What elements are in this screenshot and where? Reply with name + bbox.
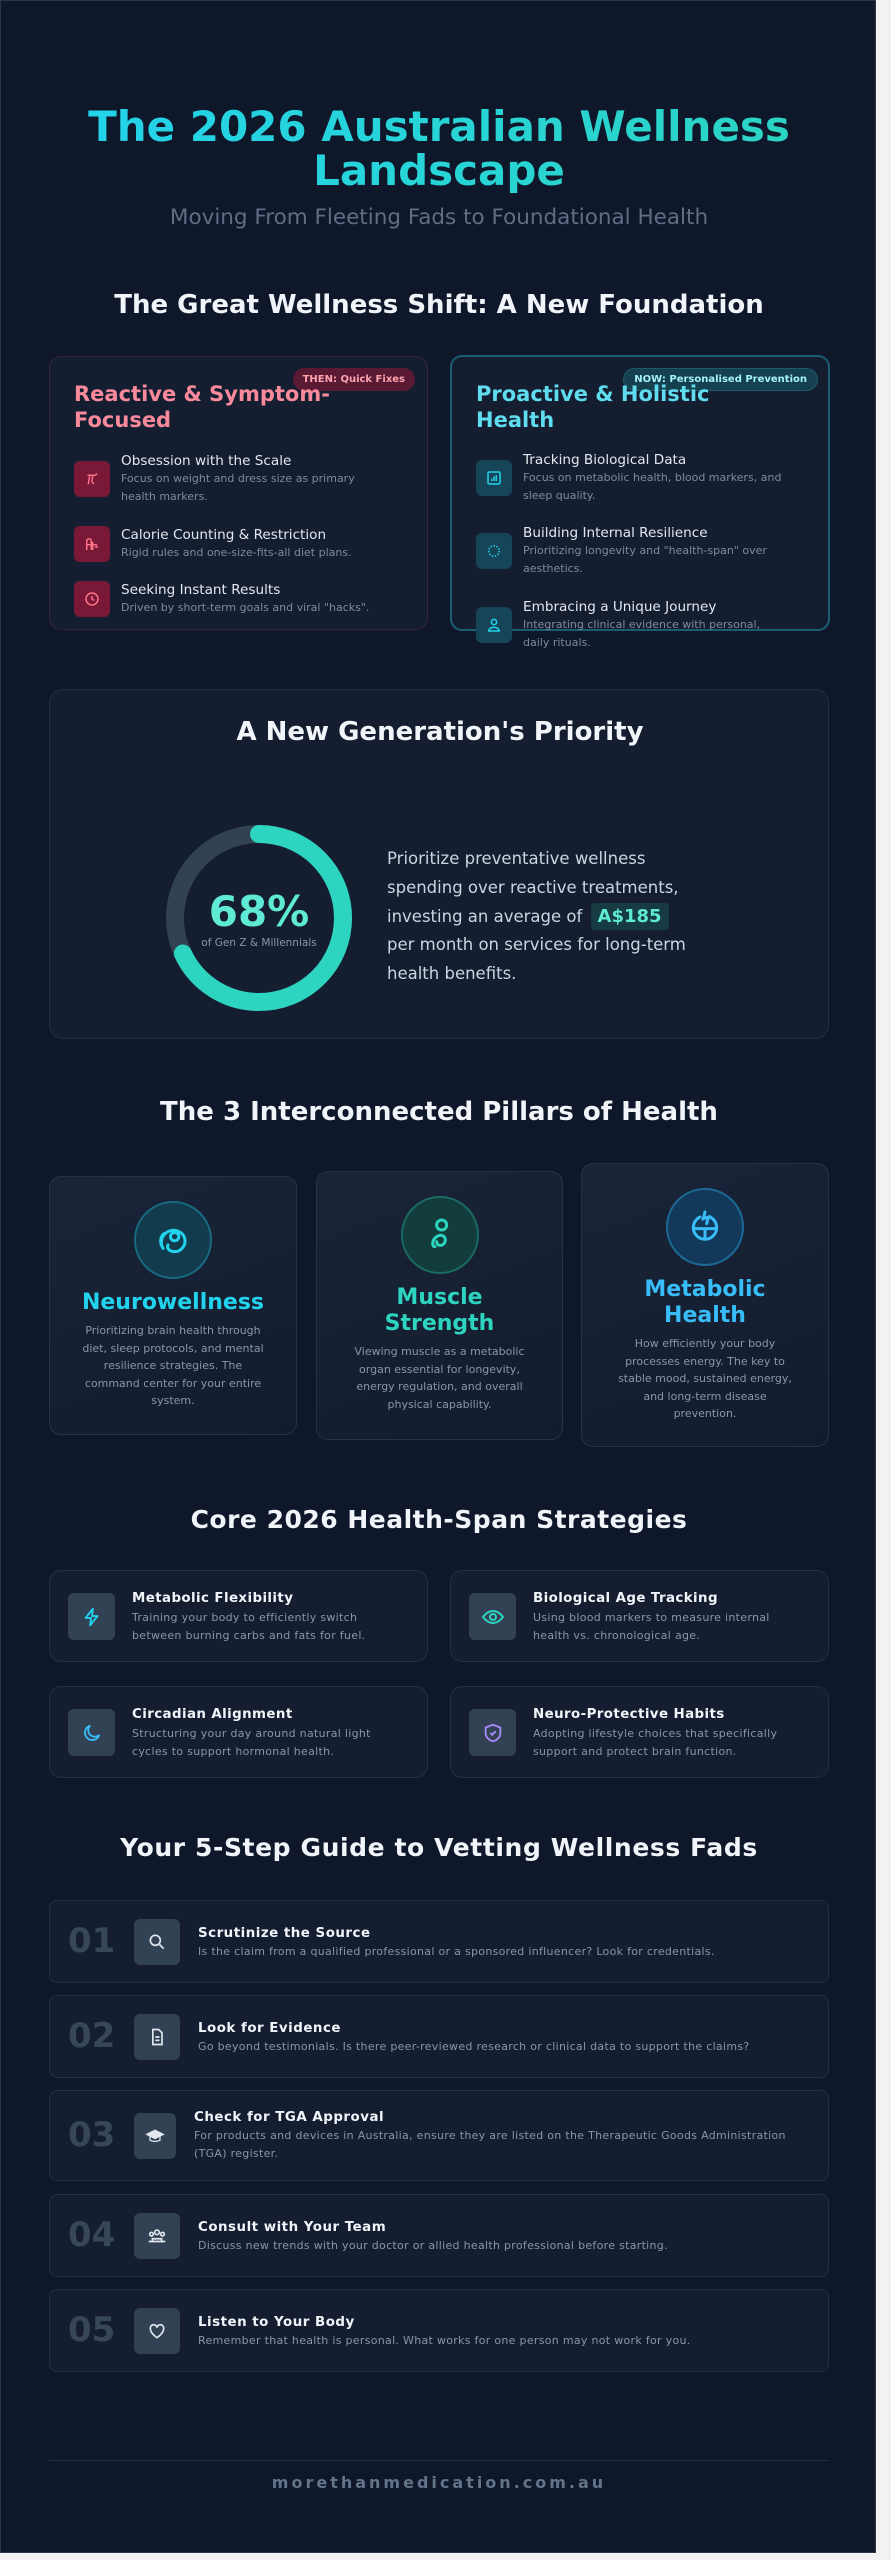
step 03: For products and devices in Australia, ensure they are listed on the Therapeutic Goods Administration (TGA) register. xyxy=(194,2129,786,2160)
text: spending: health benefits. xyxy=(387,964,516,983)
heading: wellness shift: The Great Wellness Shift: A New Foundation xyxy=(114,290,764,320)
text: spending: investing an average of A$185 xyxy=(387,906,662,927)
icon: search xyxy=(134,1919,180,1965)
item: scale: Obsession with the Scale xyxy=(121,453,291,469)
strategy: circadian xyxy=(49,1686,428,1778)
step 02: Go beyond testimonials. Is there peer-reviewed research or clinical data to support the claims? xyxy=(198,2040,750,2053)
footer: website: morethanmedication.com.au xyxy=(272,2473,606,2492)
strategy: neuro-protective: Neuro-Protective Habits xyxy=(533,1707,725,1722)
stat label: of Gen Z & Millennials xyxy=(201,937,317,949)
step 01: Is the claim from a qualified professional or a sponsored influencer? Look for credentials. xyxy=(198,1945,715,1958)
title xyxy=(1,105,877,193)
strategy: metabolic flexibility: Metabolic Flexibility xyxy=(132,1591,293,1606)
heading: strategies: Core 2026 Health-Span Strategies xyxy=(191,1505,687,1534)
panel: now xyxy=(450,355,830,631)
step 02: Look for Evidence xyxy=(198,2021,341,2036)
stat: 68%: 68% xyxy=(209,887,309,936)
card title: proactive: Proactive & Holistic xyxy=(476,382,709,406)
text: spending: per month on services for long-term xyxy=(387,935,686,954)
icon: eye xyxy=(469,1593,516,1640)
item: calorie: Rigid rules and one-size-fits-all diet plans. xyxy=(121,546,352,559)
item: resilience xyxy=(476,525,767,574)
strategy: metabolic flexibility: Training your body to efficiently switch between burning carbs and fats for fuel. xyxy=(132,1611,365,1642)
item: scale xyxy=(74,453,355,502)
subtitle: Moving From Fleeting Fads to Foundational Health xyxy=(170,205,708,230)
title: Landscape xyxy=(313,146,565,195)
pillar: neurowellness xyxy=(49,1176,297,1435)
pillar: muscle: Viewing muscle as a metabolic organ essential for longevity, energy regulation, and overall physical capability. xyxy=(354,1345,524,1410)
badge: then xyxy=(293,368,415,391)
item: resilience: Prioritizing longevity and "health-span" over xyxy=(523,544,767,557)
heading: 5-step guide: Your 5-Step Guide to Vetting Wellness Fads xyxy=(120,1833,758,1862)
icon: moon xyxy=(68,1709,115,1756)
step 05 xyxy=(49,2289,829,2372)
strategy: biological age: Using blood markers to measure internal health vs. chronological age. xyxy=(533,1611,770,1642)
step 05: 05 xyxy=(68,2310,115,2350)
card title: reactive xyxy=(74,382,330,432)
badge: now xyxy=(623,368,818,391)
card title: reactive: Focused xyxy=(74,408,171,432)
strategy: biological age: Biological Age Tracking xyxy=(533,1591,718,1606)
icon: graduation cap xyxy=(134,2113,176,2159)
step 01 xyxy=(49,1900,829,1983)
pillar: metabolic: and long-term disease xyxy=(643,1390,767,1402)
step 04: Consult with Your Team xyxy=(198,2220,386,2235)
step 01: Scrutinize the Source xyxy=(198,1926,371,1941)
icon: brain xyxy=(134,1201,212,1279)
item: calorie xyxy=(74,526,352,562)
step 03: Check for TGA Approval xyxy=(194,2110,384,2125)
icon: heart xyxy=(134,2308,180,2354)
step 02: 02 xyxy=(68,2016,115,2056)
item: journey xyxy=(476,599,760,648)
item: scale: health markers. xyxy=(121,490,208,502)
pillar: muscle: Muscle xyxy=(396,1285,483,1310)
item: tracking xyxy=(476,452,781,502)
item: scale: Focus on weight and dress size as primary xyxy=(121,472,355,485)
step 03 xyxy=(49,2090,829,2181)
step 04: Discuss new trends with your doctor or allied health professional before starting. xyxy=(198,2239,668,2252)
pillar: metabolic: stable mood, sustained energy, xyxy=(618,1372,792,1385)
title: The 2026 Australian Wellness xyxy=(88,102,790,151)
chart: donut 68% xyxy=(166,825,352,1011)
pillar: metabolic: prevention. xyxy=(674,1407,736,1420)
badge: then: THEN: Quick Fixes xyxy=(303,374,405,385)
heading: generation: A New Generation's Priority xyxy=(236,717,644,747)
text: spending: spending over reactive treatments, xyxy=(387,878,679,897)
icon: metabolic xyxy=(666,1188,744,1266)
item: resilience: Building Internal Resilience xyxy=(523,525,708,541)
step 05: Listen to Your Body xyxy=(198,2315,355,2330)
badge: now: NOW: Personalised Prevention xyxy=(634,374,807,385)
panel: then xyxy=(49,356,428,630)
step 01: 01 xyxy=(68,1921,115,1961)
step 04: 04 xyxy=(68,2215,115,2255)
pillar: metabolic xyxy=(581,1163,829,1447)
card title: reactive: Reactive & Symptom- xyxy=(74,382,330,406)
panel: new generation xyxy=(49,689,829,1039)
pillar: muscle: Strength xyxy=(385,1311,494,1336)
text: spending xyxy=(387,849,686,983)
strategy: circadian: Structuring your day around natural light cycles to support hormonal health. xyxy=(132,1727,371,1758)
icon: shield xyxy=(469,1709,516,1756)
pillar: neurowellness: Neurowellness xyxy=(82,1290,264,1315)
item: tracking: Tracking Biological Data xyxy=(523,452,686,468)
heading: pillars: The 3 Interconnected Pillars of Health xyxy=(160,1097,718,1127)
item: journey: daily rituals. xyxy=(523,636,591,648)
text: spending: Prioritize preventative wellness xyxy=(387,849,645,868)
strategy: neuro-protective: Adopting lifestyle choices that specifically support and protect brain function. xyxy=(533,1727,777,1758)
strategy: neuro-protective xyxy=(450,1686,829,1778)
icon: muscle xyxy=(400,1196,478,1274)
item: instant: Seeking Instant Results xyxy=(121,582,280,598)
item: journey: Embracing a Unique Journey xyxy=(523,599,716,615)
pillar: muscle xyxy=(316,1171,563,1440)
item: calorie: Calorie Counting & Restriction xyxy=(121,527,326,543)
card title: proactive: Health xyxy=(476,408,554,432)
pillar: metabolic: processes energy. The key to xyxy=(625,1354,785,1368)
pillar: neurowellness: Prioritizing brain health through diet, sleep protocols, and mental resilience strategies. The command center for your entire system. xyxy=(82,1324,264,1407)
card title: proactive xyxy=(476,382,709,432)
item: instant: Driven by short-term goals and viral "hacks". xyxy=(121,601,369,614)
icon: team xyxy=(134,2213,180,2259)
item: tracking: sleep quality. xyxy=(523,488,595,502)
strategy: biological age xyxy=(450,1570,829,1662)
item: instant xyxy=(74,581,369,617)
icon: bolt xyxy=(68,1593,115,1640)
step 04 xyxy=(49,2194,829,2277)
strategy: metabolic flexibility xyxy=(49,1570,428,1662)
strategy: circadian: Circadian Alignment xyxy=(132,1707,293,1722)
step 05: Remember that health is personal. What works for one person may not work for you. xyxy=(198,2334,691,2347)
item: resilience: aesthetics. xyxy=(523,562,583,574)
item: tracking: Focus on metabolic health, blood markers, and xyxy=(523,471,781,484)
item: journey: Integrating clinical evidence with personal, xyxy=(523,618,760,631)
step 02 xyxy=(49,1995,829,2078)
pillar: metabolic: Metabolic xyxy=(644,1277,766,1302)
step 03: 03 xyxy=(68,2115,115,2155)
icon: document xyxy=(134,2014,180,2060)
pillar: metabolic: How efficiently your body xyxy=(635,1337,775,1350)
pillar: metabolic: Health xyxy=(664,1303,746,1328)
